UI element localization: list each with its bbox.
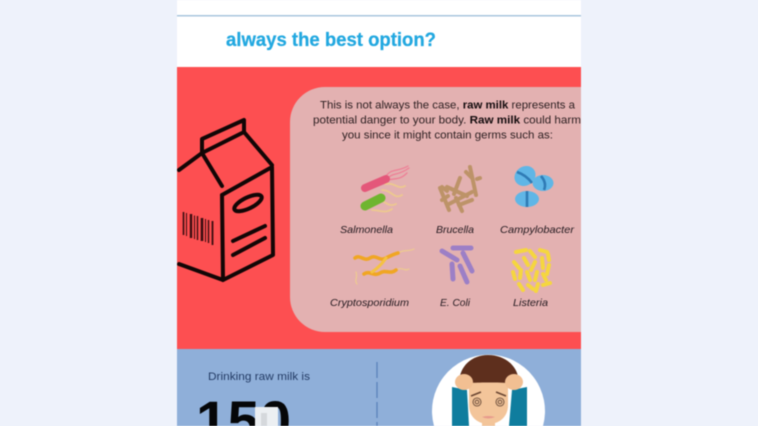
title: always the best option?: [226, 30, 436, 51]
icon: brucella: [440, 167, 480, 211]
intro text: [313, 100, 581, 142]
label: Campylobacter: Campylobacter: [500, 224, 575, 236]
icon: cryptosporidium: [355, 249, 414, 284]
intro text: you since it might contain germs such as:: [342, 130, 553, 142]
panel: germs card: [290, 87, 581, 332]
label: Brucella: Brucella: [436, 224, 474, 236]
panel: statistic: [177, 349, 581, 426]
icon: campylobacter: [511, 162, 554, 207]
intro text: This is not always the case, raw milk represents a: [320, 100, 576, 112]
label: Salmonella: Salmonella: [340, 224, 393, 236]
label: Listeria: Listeria: [513, 297, 548, 309]
icon: milk carton: [179, 120, 273, 280]
icon: milk glass: [255, 407, 278, 426]
icon: e. coli: [442, 248, 472, 282]
intro text: potential danger to your body. Raw milk could harm: [313, 114, 581, 126]
icon: listeria: [513, 250, 550, 291]
label: E. Coli: E. Coli: [440, 297, 471, 309]
label: Cryptosporidium: Cryptosporidium: [330, 297, 409, 309]
panel: raw milk danger: [177, 67, 581, 349]
icon: stressed man: [432, 355, 545, 426]
icon: salmonella: [365, 166, 409, 212]
stat intro text: Drinking raw milk is: [208, 371, 311, 383]
